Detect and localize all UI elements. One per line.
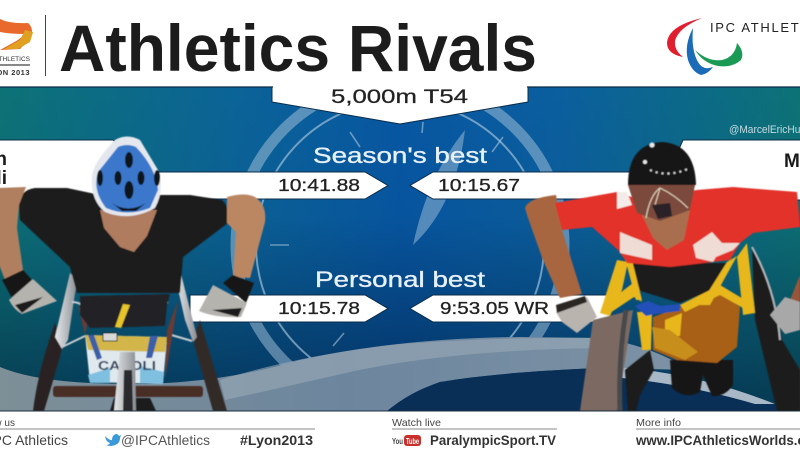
red shirt bbox=[555, 187, 800, 267]
paralympic sport tv: ParalympicSport.TV bbox=[430, 432, 557, 448]
more info label: More info bbox=[636, 417, 681, 429]
panel: left athlete name bbox=[0, 140, 125, 200]
panel: footer bbox=[0, 411, 800, 450]
icon: youtube bbox=[392, 435, 421, 446]
race number bib: CASOLI bbox=[98, 358, 156, 373]
face bbox=[642, 210, 690, 250]
blue steering bar bbox=[635, 301, 680, 316]
watch live label: Watch live bbox=[392, 417, 441, 429]
icon: twitter bird bbox=[105, 434, 121, 446]
front wheel fork bbox=[625, 350, 654, 411]
athlete: left racer in black shirt and blue helmet bbox=[0, 136, 265, 411]
divider bbox=[44, 15, 46, 76]
wheels and axle bbox=[33, 320, 227, 411]
hashtag: #Lyon2013 bbox=[240, 432, 313, 448]
bar: left personal best bbox=[190, 295, 388, 322]
bar: left season's best bbox=[150, 172, 388, 199]
panel: right athlete name bbox=[660, 140, 800, 200]
bar: left season's best: 10:41.88 bbox=[278, 175, 360, 195]
arms bbox=[525, 195, 800, 305]
bar: left personal best: 10:15.78 bbox=[278, 298, 360, 318]
athlete: right racer in red shirt and yellow chair bbox=[525, 142, 800, 411]
logo: Lyon 2013 championships bbox=[0, 19, 33, 77]
heading: personal best: Personal best bbox=[315, 267, 485, 292]
blue helmet bbox=[92, 136, 161, 216]
mirrored visor bbox=[628, 185, 695, 221]
yellow frame bbox=[600, 243, 755, 350]
orange seat body bbox=[653, 293, 740, 363]
arms bbox=[0, 187, 265, 280]
logo: agitos bbox=[667, 18, 742, 75]
chair frame bbox=[55, 270, 197, 411]
bar: right personal best bbox=[410, 295, 610, 322]
race number bib bbox=[85, 335, 167, 384]
rear wheels bbox=[580, 247, 800, 411]
bar: right personal best: 9:53.05 WR bbox=[440, 298, 549, 318]
bar: right season's best: 10:15.67 bbox=[438, 175, 520, 195]
gloves bbox=[556, 296, 800, 334]
black helmet bbox=[628, 142, 696, 185]
banner: event name: 5,000m T54 bbox=[331, 86, 468, 108]
track swoosh bbox=[0, 337, 800, 411]
shirt bbox=[19, 188, 228, 293]
panel: blue stadium background bbox=[0, 87, 800, 411]
title: Athletics Rivals bbox=[59, 11, 537, 85]
bar: right season's best bbox=[410, 172, 650, 199]
gloves bbox=[2, 270, 254, 317]
waist pouch bbox=[80, 294, 170, 328]
face bbox=[100, 210, 157, 252]
feet bbox=[670, 360, 733, 396]
black seat bbox=[627, 263, 727, 303]
twitter handle: @IPCAthletics bbox=[121, 432, 210, 448]
foot guard bbox=[652, 327, 698, 360]
banner: event name bbox=[272, 84, 528, 124]
heading: season's best: Season's best bbox=[313, 143, 487, 168]
icon: youtube: Tube bbox=[406, 437, 419, 446]
icon: youtube: You bbox=[392, 437, 403, 446]
compass dial graphic bbox=[236, 81, 564, 409]
